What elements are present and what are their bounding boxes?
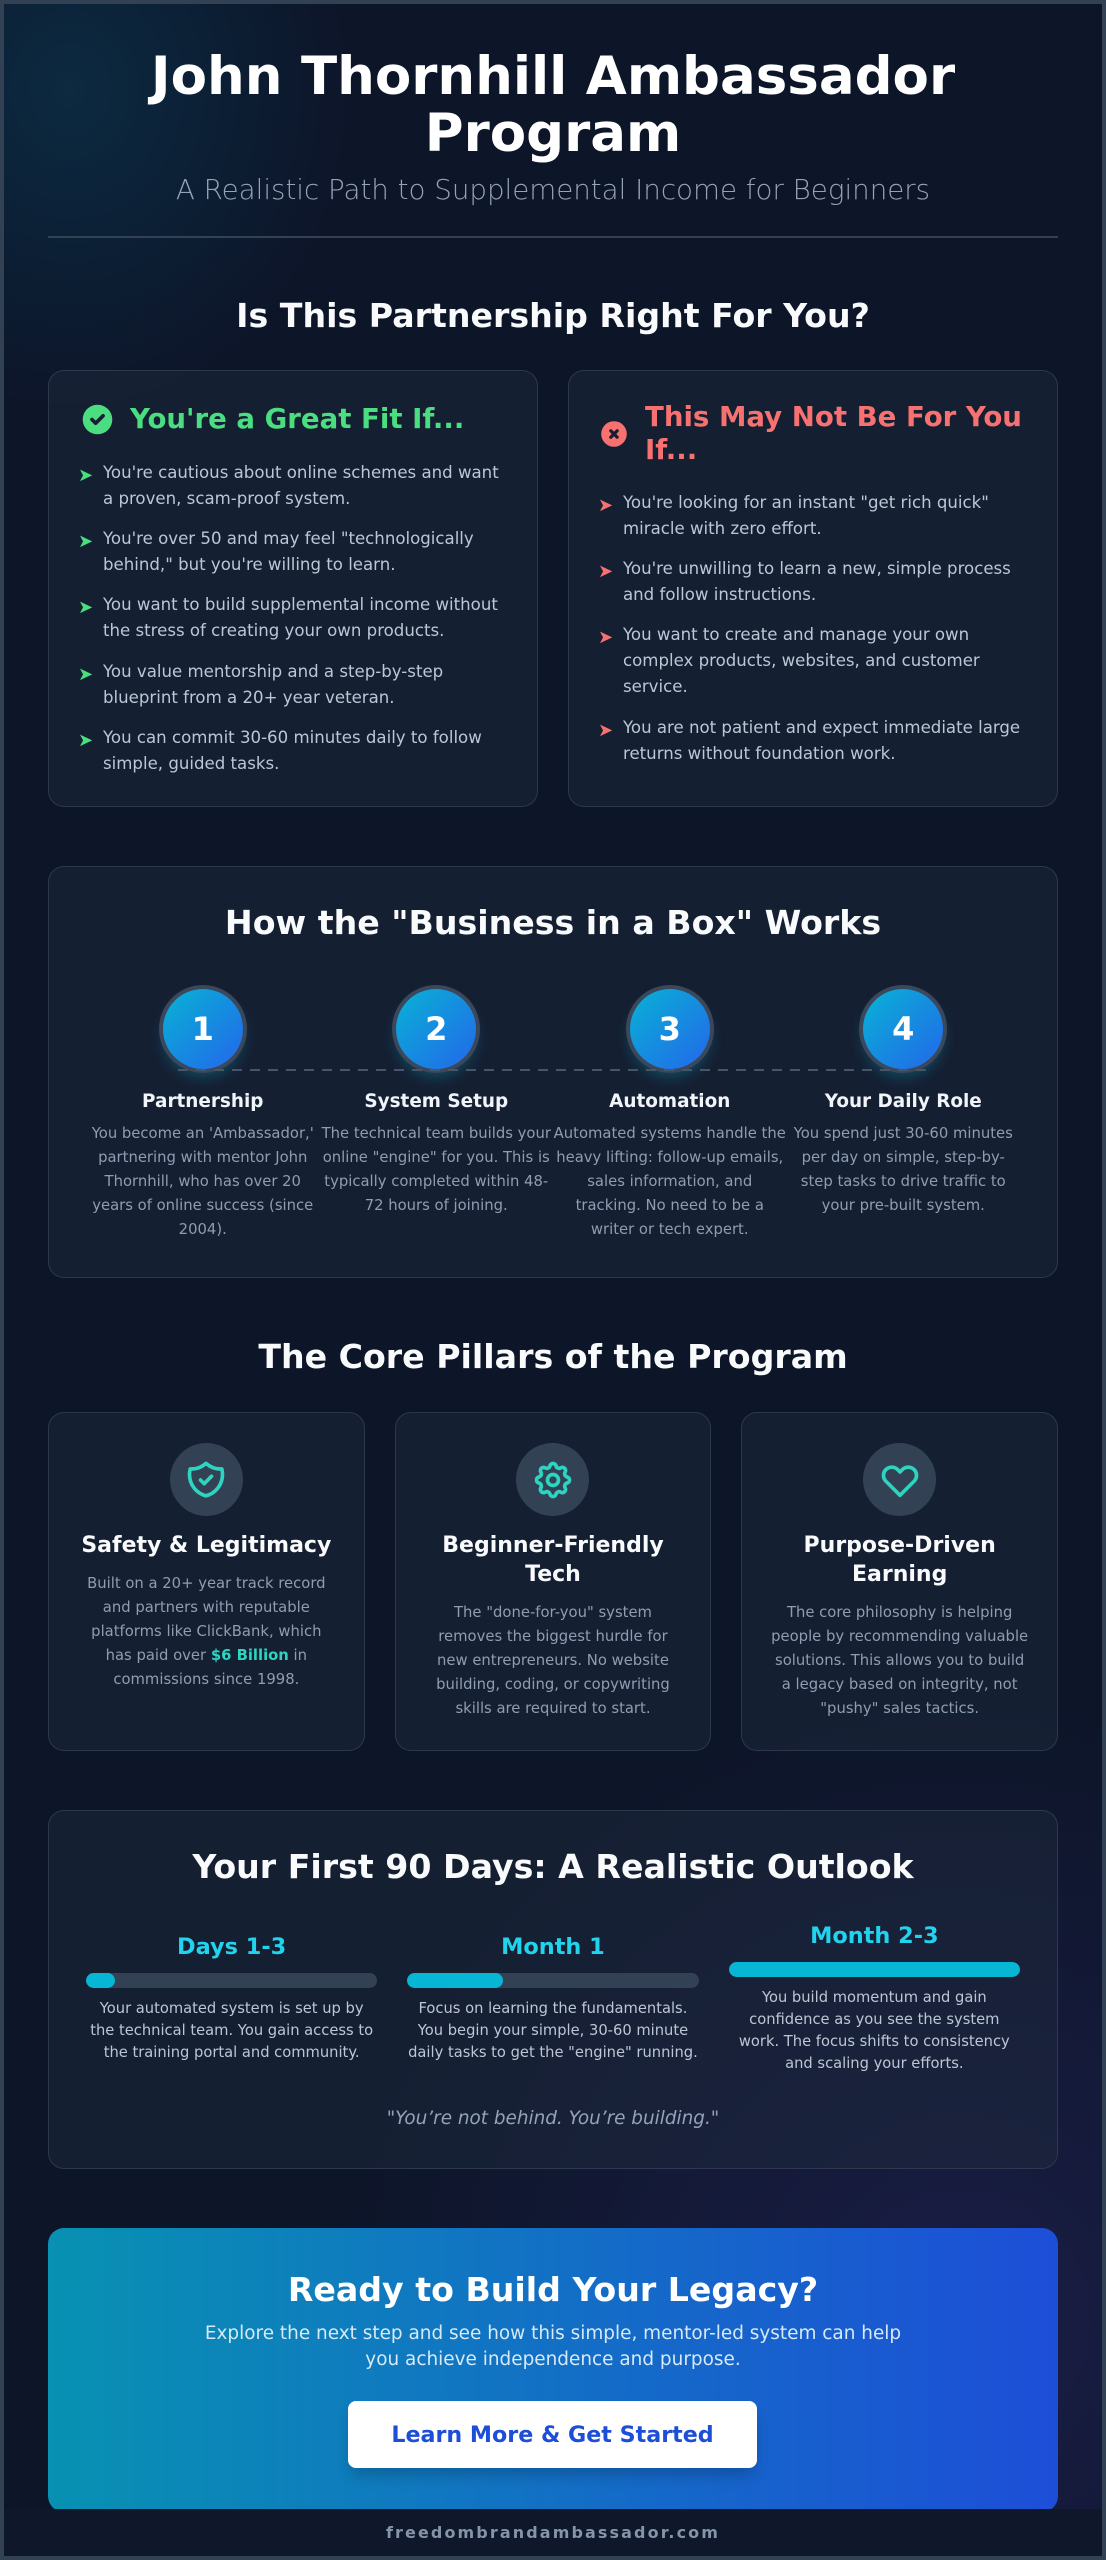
tech title xyxy=(442,1533,664,1587)
title: John Thornhill Ambassador xyxy=(151,46,955,107)
heading: partnership fit: Is This Partnership Right For You? xyxy=(236,296,870,335)
month 1 text: Focus on learning the fundamentals. xyxy=(418,2000,687,2017)
step 1 xyxy=(92,985,314,1238)
step 4 title: Your Daily Role xyxy=(825,1091,982,1112)
step 2 title: System Setup xyxy=(364,1091,508,1112)
not a fit heading: If... xyxy=(645,433,697,466)
panel: great fit xyxy=(48,370,538,807)
panel: great fit: ➤ xyxy=(78,664,93,685)
great fit list: a proven, scam-proof system. xyxy=(103,489,350,508)
tech text: skills are required to start. xyxy=(455,1700,651,1717)
great fit list: You want to build supplemental income without xyxy=(103,595,498,614)
not a fit list: and follow instructions. xyxy=(623,585,816,604)
step 2 text: 72 hours of joining. xyxy=(365,1197,508,1214)
step 3 text: heavy lifting: follow-up emails, xyxy=(556,1149,783,1166)
panel: great fit: ➤ xyxy=(78,531,93,552)
tech text: building, coding, or copywriting xyxy=(436,1676,670,1693)
safety text: platforms like ClickBank, which xyxy=(91,1623,321,1640)
heading: core pillars: The Core Pillars of the Program xyxy=(258,1337,848,1376)
footer site name: freedombrandambassador.com xyxy=(386,2523,720,2542)
purpose title xyxy=(804,1533,996,1587)
panel: call to action xyxy=(48,2228,1058,2512)
title: Program xyxy=(425,103,681,164)
panel: how it works xyxy=(48,866,1058,1278)
step 3 number: 3 xyxy=(659,1010,681,1048)
not a fit list: returns without foundation work. xyxy=(623,744,896,763)
tech title: Beginner-Friendly xyxy=(442,1533,664,1558)
step 1 title: Partnership xyxy=(142,1091,263,1112)
panel: not a fit xyxy=(568,370,1058,807)
step 3 text xyxy=(554,1125,786,1238)
icon: x circle xyxy=(601,421,627,447)
not a fit list: You're unwilling to learn a new, simple process xyxy=(623,559,1011,578)
cta button xyxy=(348,2401,757,2468)
month 2-3 label: Month 2-3 xyxy=(810,1923,939,1949)
not a fit list: You're looking for an instant "get rich quick" xyxy=(623,493,989,512)
icon: heart xyxy=(863,1443,936,1516)
month 2-3 progress bar xyxy=(729,1962,1020,1977)
panel: great fit: ➤ xyxy=(78,730,93,751)
icon: cog xyxy=(516,1443,589,1516)
not a fit list: miracle with zero effort. xyxy=(623,519,822,538)
panel: great fit: ➤ xyxy=(78,465,93,486)
month 2-3 text: confidence as you see the system xyxy=(749,2011,999,2028)
days 1-3 label: Days 1-3 xyxy=(177,1934,286,1960)
step 3 text: writer or tech expert. xyxy=(591,1221,749,1238)
tech text: new entrepreneurs. No website xyxy=(437,1652,669,1669)
tech text xyxy=(436,1604,670,1717)
days 1-3 progress bar xyxy=(86,1973,377,1988)
step 3 text: sales information, and xyxy=(587,1173,752,1190)
great fit list: the stress of creating your own products. xyxy=(103,621,444,640)
purpose text: solutions. This allows you to build xyxy=(775,1652,1024,1669)
panel: not a fit: ➤ xyxy=(598,561,613,582)
not a fit list: service. xyxy=(623,677,688,696)
month 1 progress bar xyxy=(407,1973,699,1988)
great fit list xyxy=(78,463,499,773)
step 2 text: online "engine" for you. This is xyxy=(323,1149,550,1166)
safety text: has paid over $6 Billion in xyxy=(106,1647,307,1664)
not a fit heading xyxy=(645,400,1022,466)
subtitle: A Realistic Path to Supplemental Income for Beginners xyxy=(176,173,930,206)
connector line xyxy=(178,1069,926,1071)
great fit list: You're over 50 and may feel "technologically xyxy=(103,529,474,548)
step 1 text: years of online success (since xyxy=(92,1197,313,1214)
days 1-3 text xyxy=(90,2000,373,2061)
step 1 number: 1 xyxy=(192,1010,214,1048)
days 1-3 text: the training portal and community. xyxy=(104,2044,360,2061)
not a fit list: You are not patient and expect immediate large xyxy=(623,718,1020,737)
how it works heading: How the "Business in a Box" Works xyxy=(225,903,881,942)
tech title: Tech xyxy=(525,1562,581,1587)
step 4 text: step tasks to drive traffic to xyxy=(801,1173,1006,1190)
great fit list: simple, guided tasks. xyxy=(103,754,279,773)
purpose title: Earning xyxy=(852,1562,947,1587)
step 2 text: The technical team builds your xyxy=(322,1125,551,1142)
step 1 text: Thornhill, who has over 20 xyxy=(105,1173,301,1190)
panel: first 90 days xyxy=(48,1810,1058,2169)
header xyxy=(48,46,1058,238)
cta text: Explore the next step and see how this simple, mentor-led system can help xyxy=(205,2323,901,2344)
cta text: you achieve independence and purpose. xyxy=(365,2349,741,2370)
step 3 title: Automation xyxy=(609,1091,730,1112)
title xyxy=(148,46,955,164)
great fit heading: You're a Great Fit If... xyxy=(130,402,464,435)
purpose title: Purpose-Driven xyxy=(804,1533,996,1558)
tech text: removes the biggest hurdle for xyxy=(438,1628,668,1645)
month 2-3 text: and scaling your efforts. xyxy=(785,2055,964,2072)
panel: purpose pillar xyxy=(741,1412,1058,1751)
step 4 xyxy=(794,985,1013,1214)
month 2-3 text: You build momentum and gain xyxy=(762,1989,987,2006)
month 2-3 text xyxy=(739,1989,1010,2072)
not a fit list: You want to create and manage your own xyxy=(623,625,969,644)
great fit list: You're cautious about online schemes and want xyxy=(103,463,499,482)
stage: month 1 xyxy=(407,1934,699,2061)
step 4 text xyxy=(794,1125,1013,1214)
month 2-3 text: work. The focus shifts to consistency xyxy=(739,2033,1010,2050)
header divider xyxy=(48,236,1058,238)
step 1 text xyxy=(92,1125,314,1238)
purpose text xyxy=(771,1604,1028,1717)
panel: safety pillar xyxy=(48,1412,365,1751)
step 4 number xyxy=(859,985,947,1073)
month 1 text: daily tasks to get the "engine" running. xyxy=(408,2044,698,2061)
step 3 text: Automated systems handle the xyxy=(554,1125,786,1142)
not a fit list xyxy=(598,493,1020,763)
cta heading: Ready to Build Your Legacy? xyxy=(288,2270,818,2309)
quote: "You’re not behind. You’re building." xyxy=(387,2108,719,2129)
step 2 number xyxy=(392,985,480,1073)
panel: not a fit: ➤ xyxy=(598,720,613,741)
timeline heading: Your First 90 Days: A Realistic Outlook xyxy=(192,1847,914,1886)
great fit list: blueprint from a 20+ year veteran. xyxy=(103,688,395,707)
great fit list: You value mentorship and a step-by-step xyxy=(103,662,443,681)
panel: great fit: ➤ xyxy=(78,597,93,618)
stage: days 1-3 xyxy=(86,1934,377,2061)
panel: tech pillar xyxy=(395,1412,711,1751)
step 2 xyxy=(322,985,551,1214)
not a fit list: complex products, websites, and customer xyxy=(623,651,980,670)
step 1 text: partnering with mentor John xyxy=(98,1149,307,1166)
stage: month 2-3 xyxy=(729,1923,1020,2072)
month 1 text xyxy=(408,2000,698,2061)
step 2 text: typically completed within 48- xyxy=(324,1173,548,1190)
step 1 number xyxy=(159,985,247,1073)
great fit list: You can commit 30-60 minutes daily to follow xyxy=(103,728,482,747)
step 2 number: 2 xyxy=(425,1010,447,1048)
step 3 xyxy=(554,985,786,1238)
purpose text: people by recommending valuable xyxy=(771,1628,1028,1645)
not a fit heading: This May Not Be For You xyxy=(645,400,1022,433)
step 2 text xyxy=(322,1125,551,1214)
step 1 text: You become an 'Ambassador,' xyxy=(92,1125,314,1142)
tech text: The "done-for-you" system xyxy=(454,1604,652,1621)
days 1-3 text: Your automated system is set up by xyxy=(100,2000,364,2017)
safety text xyxy=(87,1575,326,1688)
days 1-3 text: the technical team. You gain access to xyxy=(90,2022,373,2039)
great fit list: behind," but you're willing to learn. xyxy=(103,555,396,574)
purpose text: The core philosophy is helping xyxy=(787,1604,1012,1621)
safety text: and partners with reputable xyxy=(103,1599,310,1616)
cta button: Learn More & Get Started xyxy=(391,2422,714,2448)
icon: shield xyxy=(170,1443,243,1516)
step 3 number xyxy=(626,985,714,1073)
step 4 text: per day on simple, step-by- xyxy=(802,1149,1005,1166)
cta text xyxy=(205,2323,901,2370)
month 1 label: Month 1 xyxy=(501,1934,605,1960)
panel: not a fit: ➤ xyxy=(598,627,613,648)
safety title: Safety & Legitimacy xyxy=(81,1533,331,1558)
panel: not a fit: ➤ xyxy=(598,495,613,516)
step 4 number: 4 xyxy=(892,1010,914,1048)
safety text: Built on a 20+ year track record xyxy=(87,1575,326,1592)
step 4 text: your pre-built system. xyxy=(822,1197,985,1214)
safety text: commissions since 1998. xyxy=(113,1671,299,1688)
purpose text: "pushy" sales tactics. xyxy=(820,1700,979,1717)
step 4 text: You spend just 30-60 minutes xyxy=(794,1125,1013,1142)
step 3 text: tracking. No need to be a xyxy=(576,1197,764,1214)
step 1 text: 2004). xyxy=(179,1221,227,1238)
icon: check circle xyxy=(82,404,112,434)
footer xyxy=(4,2509,1102,2556)
purpose text: a legacy based on integrity, not xyxy=(782,1676,1018,1693)
month 1 text: You begin your simple, 30-60 minute xyxy=(418,2022,688,2039)
